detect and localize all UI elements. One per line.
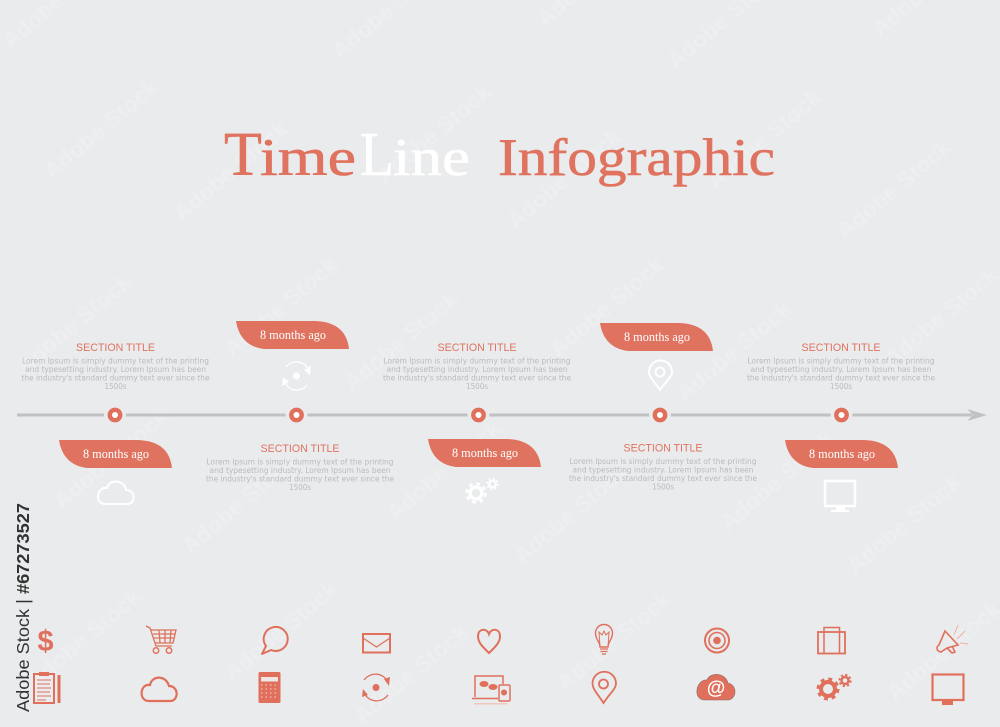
- section block 1: the industry's standard dummy text ever since the: [22, 372, 210, 382]
- icon: megaphone: [937, 625, 968, 653]
- title: T: [224, 121, 262, 189]
- watermark pattern: Adobe Stock: [349, 618, 473, 727]
- watermark pattern: Adobe Stock: [49, 403, 173, 514]
- icon: shopping cart: [146, 626, 176, 653]
- icon: refresh: [362, 674, 390, 701]
- section block 1: Lorem Ipsum is simply dummy text of the printing: [22, 356, 209, 366]
- section block 3: [383, 342, 571, 391]
- date tab 1: 8 months ago: [83, 447, 149, 461]
- watermark pattern: Adobe Stock: [177, 448, 301, 559]
- watermark pattern: Adobe Stock: [672, 295, 796, 406]
- watermark pattern: Adobe Stock: [22, 583, 146, 694]
- date tab 4: [600, 323, 713, 351]
- section block 2: [206, 443, 394, 492]
- icon: white monitor: [825, 481, 855, 512]
- date tab 2: 8 months ago: [260, 328, 326, 342]
- icon: white cloud: [98, 481, 134, 504]
- section block 5: the industry's standard dummy text ever since the: [747, 372, 935, 382]
- watermark pattern: Adobe Stock: [509, 458, 633, 569]
- section block 2: 1500s: [289, 482, 311, 492]
- title: ine: [393, 129, 470, 187]
- section block 1: SECTION TITLE: [76, 342, 155, 354]
- timeline arrow: [17, 409, 987, 421]
- icon: heart: [478, 630, 500, 653]
- section block 4: 1500s: [652, 482, 674, 492]
- section block 5: Lorem Ipsum is simply dummy text of the printing: [748, 356, 934, 366]
- section block 1: [22, 342, 210, 391]
- watermark pattern: Adobe Stock: [879, 261, 1000, 372]
- timeline node 3: [468, 404, 490, 426]
- watermark pattern: Adobe Stock: [842, 468, 966, 579]
- timeline node 5: [830, 404, 852, 426]
- vertical stock caption: Adobe Stock | #67273527: [13, 503, 33, 712]
- icon: monitor: [932, 674, 964, 705]
- watermark pattern: Adobe Stock: [832, 133, 956, 244]
- watermark pattern: Adobe Stock: [372, 78, 496, 189]
- watermark pattern: Adobe Stock: [552, 585, 676, 696]
- icon: clipboard with pencil: [34, 672, 60, 703]
- section block 1: 1500s: [104, 381, 126, 391]
- icon: target: [705, 628, 729, 652]
- section block 4: Lorem Ipsum is simply dummy text of the printing: [570, 456, 756, 466]
- icon: white gears: [466, 479, 498, 502]
- icon: devices: [472, 676, 510, 704]
- icon: at cloud: [697, 674, 735, 700]
- watermark pattern: Adobe Stock: [219, 251, 343, 362]
- date tab 4: 8 months ago: [624, 330, 690, 344]
- date tab 1: [59, 440, 172, 468]
- date tab 5: 8 months ago: [809, 447, 875, 461]
- icon: location pin: [592, 672, 616, 703]
- watermark pattern: Adobe Stock: [169, 115, 293, 226]
- icon: briefcase: [818, 628, 845, 654]
- section block 2: SECTION TITLE: [260, 443, 340, 455]
- section block 2: and typesetting industry. Lorem Ipsum has been: [210, 465, 390, 475]
- section block 5: [747, 342, 935, 391]
- section block 5: SECTION TITLE: [802, 342, 880, 354]
- section block 4: and typesetting industry. Lorem Ipsum has been: [572, 464, 754, 474]
- icon: dollar: $: [38, 625, 54, 658]
- section block 3: and typesetting industry. Lorem Ipsum has been: [386, 364, 568, 374]
- date tab 2: [236, 321, 349, 349]
- date tab 3: [428, 439, 541, 467]
- section block 2: the industry's standard dummy text ever since the: [206, 474, 394, 484]
- watermark pattern: Adobe Stock: [39, 73, 163, 184]
- section block 5: 1500s: [830, 381, 852, 391]
- watermark pattern: Adobe Stock: [702, 83, 826, 194]
- icon: at cloud: @: [707, 678, 725, 699]
- icon: white refresh: [282, 362, 311, 390]
- section block 4: [569, 442, 757, 492]
- icon: envelope: [363, 634, 390, 652]
- section block 2: Lorem Ipsum is simply dummy text of the printing: [206, 456, 394, 466]
- title: Infographic: [498, 129, 775, 187]
- icon: gears: [818, 675, 851, 699]
- title: ime: [260, 129, 356, 187]
- date tab 3: 8 months ago: [452, 446, 518, 460]
- date tab 5: [785, 440, 898, 468]
- section block 3: 1500s: [466, 381, 488, 391]
- section block 3: the industry's standard dummy text ever since the: [383, 372, 571, 382]
- section block 3: Lorem Ipsum is simply dummy text of the printing: [384, 356, 570, 366]
- watermark pattern: Adobe Stock: [12, 268, 136, 379]
- timeline node 1: [104, 404, 126, 426]
- watermark pattern: Adobe Stock: [339, 285, 463, 396]
- section block 3: SECTION TITLE: [438, 342, 516, 354]
- title: L: [360, 121, 394, 189]
- timeline node 2: [286, 404, 308, 426]
- section block 1: and typesetting industry. Lorem Ipsum has been: [25, 364, 206, 374]
- icon: speech bubble: [262, 627, 288, 654]
- watermark pattern: Adobe Stock: [502, 123, 626, 234]
- timeline node 4: [649, 404, 671, 426]
- icon: white location pin: [649, 361, 672, 390]
- section block 4: the industry's standard dummy text ever since the: [569, 473, 757, 483]
- watermark pattern: Adobe Stock: [219, 575, 343, 686]
- watermark pattern: Adobe Stock: [545, 251, 669, 362]
- icon: calculator: [258, 672, 280, 703]
- section block 5: and typesetting industry. Lorem Ipsum has been: [750, 364, 932, 374]
- watermark pattern: Adobe Stock: [382, 415, 506, 526]
- watermark pattern: Adobe Stock: [715, 425, 839, 536]
- icon: cloud: [142, 678, 177, 701]
- icon: light bulb: [596, 624, 612, 654]
- title: [224, 121, 775, 189]
- section block 4: SECTION TITLE: [624, 442, 702, 454]
